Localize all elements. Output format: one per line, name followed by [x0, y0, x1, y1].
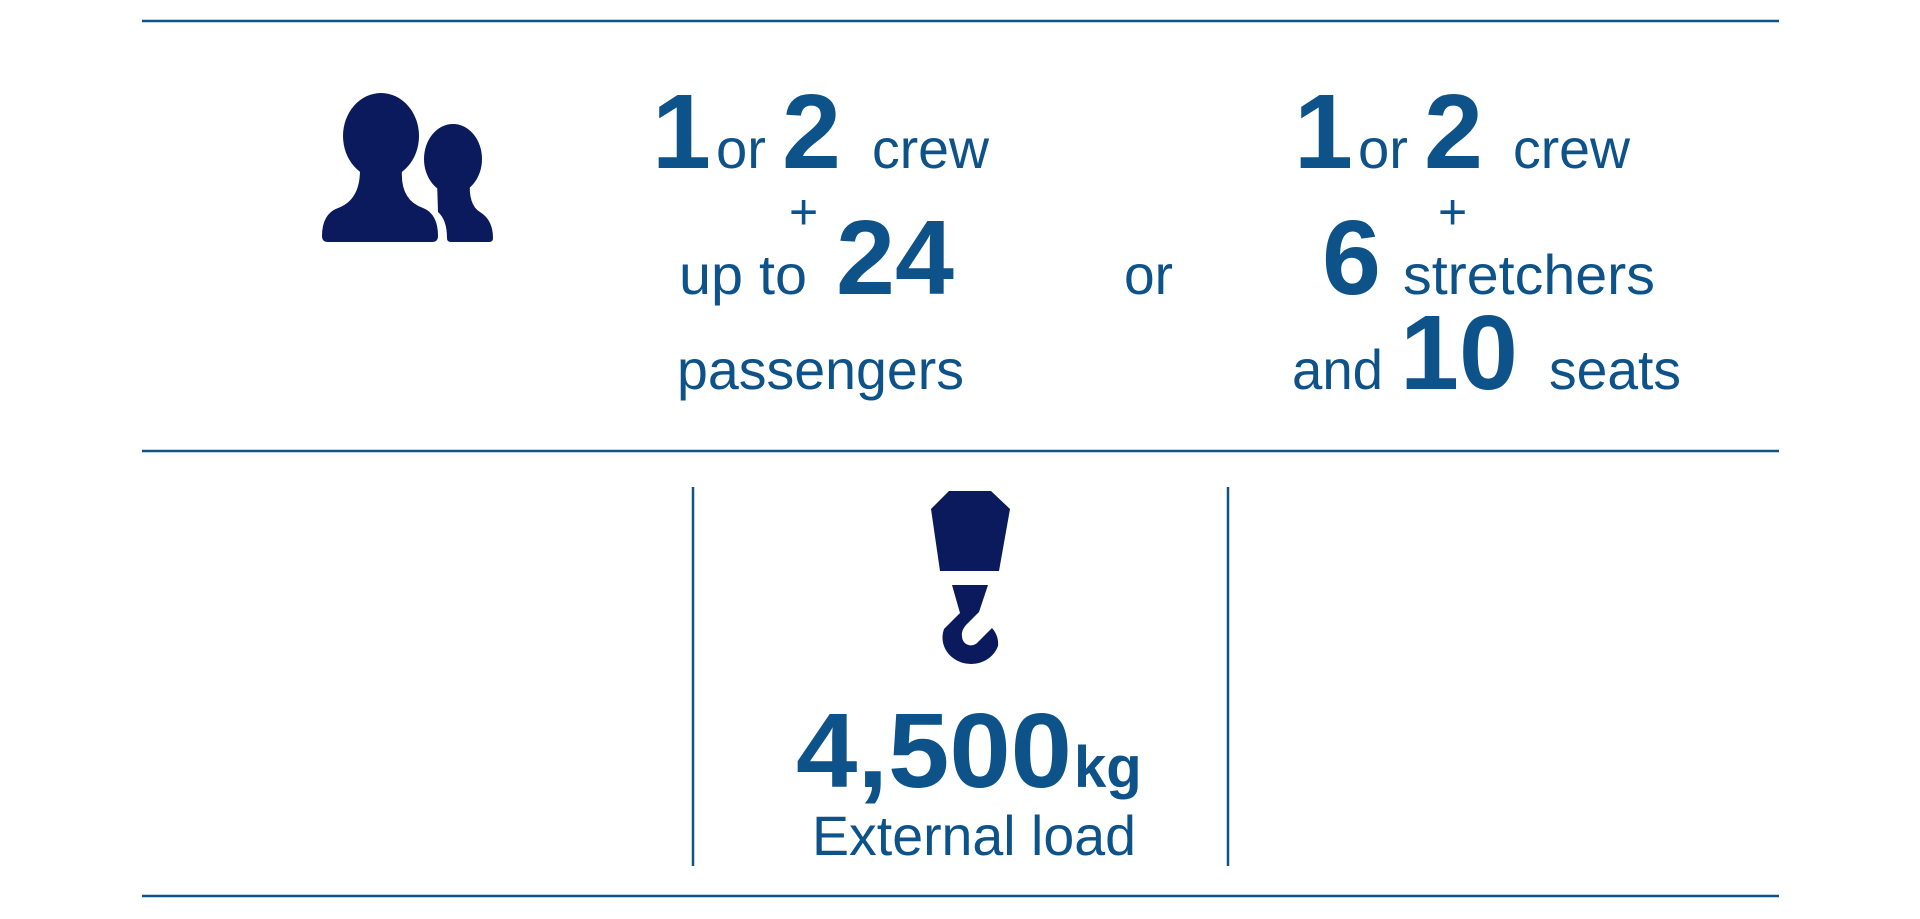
text: load: [796, 692, 1142, 867]
text: crew + passengers: passengers: [677, 338, 964, 401]
text: crew + stretchers: seats: [1549, 338, 1681, 401]
text: crew + passengers: crew: [872, 117, 990, 180]
text: crew + stretchers: and: [1292, 338, 1383, 401]
text: crew + stretchers: [1292, 73, 1681, 412]
text: load: 4,500: [796, 692, 1072, 810]
text: crew + passengers: [652, 73, 990, 401]
text: load: kg: [1074, 735, 1142, 800]
text: crew + passengers: 2: [782, 73, 841, 191]
text: crew + stretchers: 10: [1400, 294, 1518, 412]
text: crew + stretchers: stretchers: [1403, 243, 1655, 306]
text: crew + stretchers: 6: [1322, 199, 1381, 317]
text: crew + stretchers: +: [1438, 184, 1467, 240]
text: crew + passengers: 24: [836, 199, 954, 317]
text: crew + stretchers: crew: [1513, 117, 1631, 180]
text: load: External load: [812, 804, 1136, 867]
icon: hook: [931, 491, 1010, 664]
icon: people: [320, 93, 493, 244]
text: crew + passengers: +: [789, 184, 818, 240]
text: crew + passengers: 1: [652, 73, 711, 191]
text: or: or: [1124, 243, 1173, 306]
text: crew + stretchers: 1: [1294, 73, 1353, 191]
text: crew + stretchers: 2: [1424, 73, 1483, 191]
text: crew + stretchers: or: [1358, 117, 1408, 180]
text: crew + passengers: or: [716, 117, 766, 180]
text: crew + passengers: up to: [679, 243, 807, 306]
